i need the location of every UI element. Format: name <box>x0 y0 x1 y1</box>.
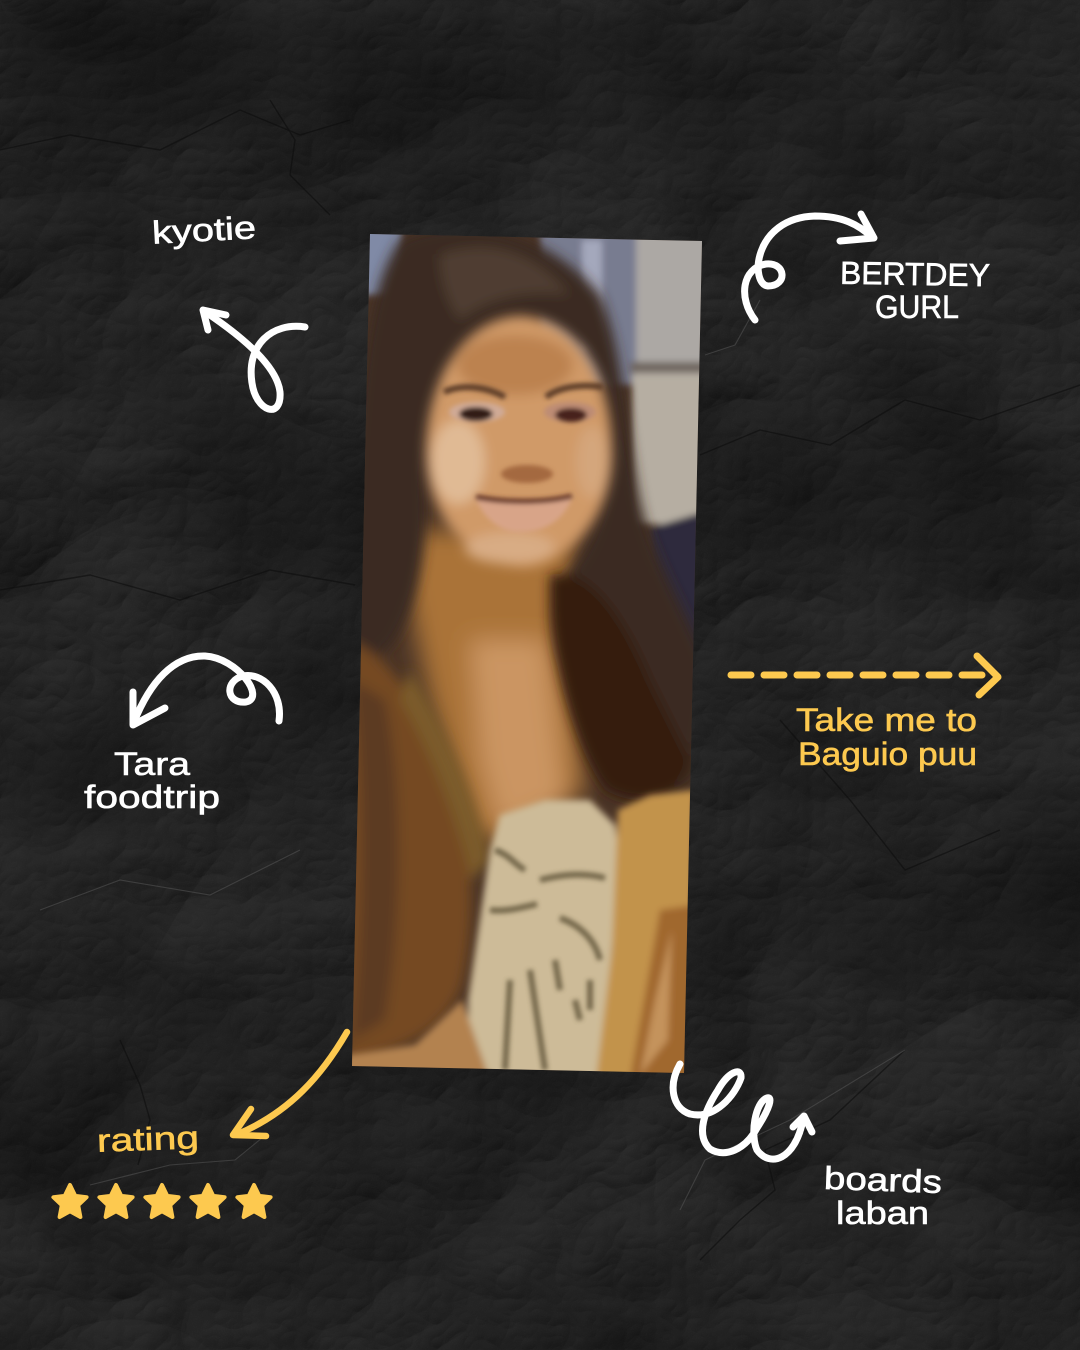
arrow: rating arrow <box>233 1032 347 1136</box>
arrow: dashed yellow arrow <box>731 656 998 695</box>
arrow: kyotie loop arrow <box>203 310 305 409</box>
photo: face <box>426 316 612 567</box>
label: boards laban: boards <box>823 1160 943 1200</box>
label: kyotie: kyotie <box>151 209 257 251</box>
label: BERTDEY GURL: BERTDEY <box>840 255 990 293</box>
label: BERTDEY GURL <box>840 255 990 325</box>
label: Take me to Baguio puu <box>796 702 977 772</box>
photo background: wall and window <box>368 234 702 641</box>
photo: dress and cardigan <box>345 790 695 1080</box>
photo: portrait collage cutout <box>352 234 702 1073</box>
label: Take me to Baguio puu: Baguio puu <box>798 736 977 772</box>
icon: five star rating <box>53 1185 271 1217</box>
label: Tara foodtrip: foodtrip <box>84 779 220 815</box>
label: BERTDEY GURL: GURL <box>875 289 959 325</box>
arrow: birthday loop arrow <box>745 214 874 320</box>
arrow: foodtrip loop arrow <box>133 656 279 725</box>
photo: dark hair <box>345 227 710 1062</box>
photo: facial features <box>444 386 603 532</box>
photo: neck and chest <box>395 530 585 840</box>
label: rating: rating <box>96 1119 200 1159</box>
label: boards laban <box>823 1160 943 1231</box>
arrow: boards curly arrow <box>673 1064 812 1159</box>
label: boards laban: laban <box>836 1195 929 1231</box>
label: Take me to Baguio puu: Take me to <box>796 702 977 738</box>
label: Tara foodtrip <box>84 746 220 815</box>
label: Tara foodtrip: Tara <box>114 746 190 782</box>
